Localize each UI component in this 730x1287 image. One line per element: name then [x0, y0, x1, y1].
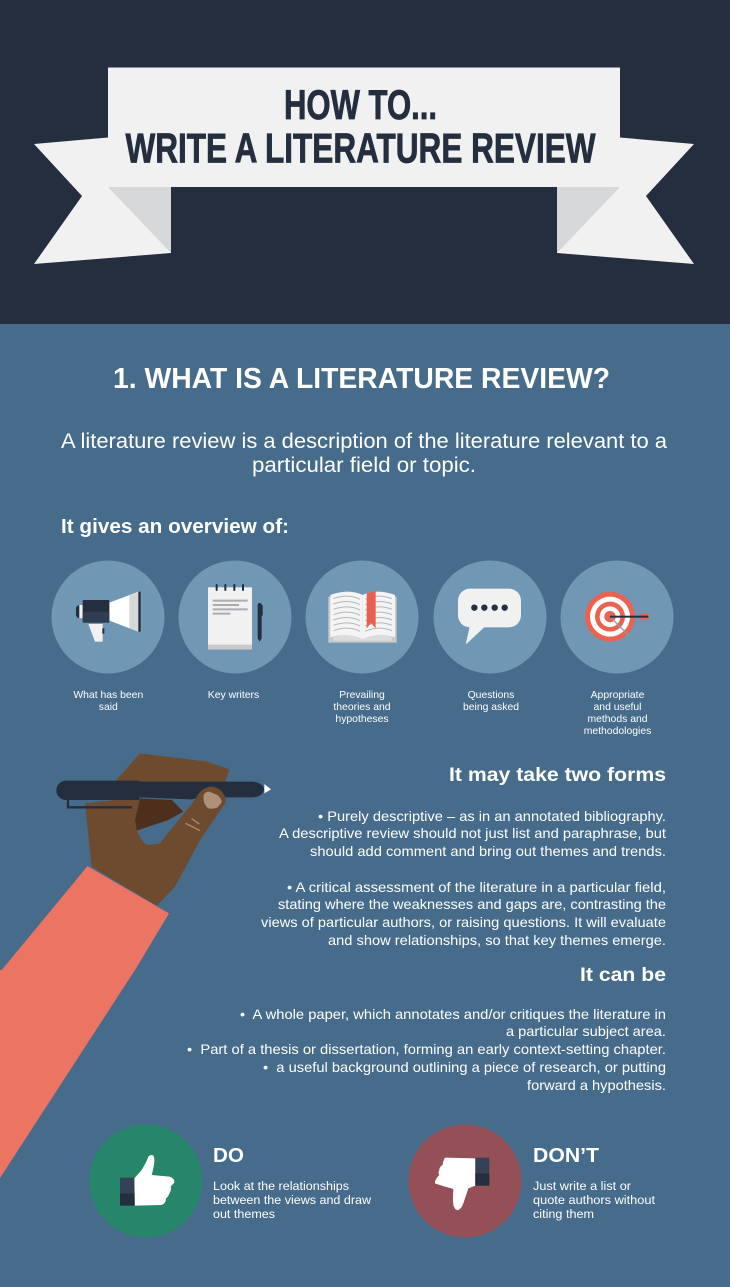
- intro text: [61, 429, 667, 477]
- label: said: [99, 702, 118, 713]
- label: Appropriate: [591, 690, 645, 701]
- paragraph: descriptive: A descriptive review should not just list and paraphrase, but: [279, 826, 666, 841]
- item: questions being asked: [434, 560, 546, 713]
- do text: out themes: [213, 1207, 275, 1221]
- title: HOW TO...: [284, 81, 437, 128]
- hand: [85, 753, 229, 906]
- label: What has been: [73, 690, 143, 701]
- paragraph: descriptive: • Purely descriptive – as in an annotated bibliography.: [318, 809, 666, 824]
- panel: do: [89, 1124, 371, 1238]
- icon: megaphone: [76, 592, 141, 642]
- ribbon banner: [34, 68, 694, 264]
- don't text: citing them: [533, 1207, 594, 1221]
- intro text: particular field or topic.: [252, 453, 476, 477]
- text block: two forms: [261, 764, 666, 948]
- icon: speech bubble: [458, 589, 521, 645]
- label: and useful: [594, 702, 641, 713]
- paragraph: descriptive: should add comment and bring out themes and trends.: [310, 844, 666, 859]
- section heading: 1. WHAT IS A LITERATURE REVIEW?: [113, 363, 610, 395]
- sleeve: [0, 866, 169, 1178]
- subheading: It may take two forms: [449, 764, 666, 786]
- don't text: [533, 1144, 656, 1221]
- bullet list: • a useful background outlining a piece of research, or putting: [263, 1060, 666, 1075]
- item: key writers: [178, 560, 292, 701]
- label: methodologies: [584, 726, 651, 737]
- icon: notepad and pen: [208, 585, 263, 649]
- label: [463, 690, 519, 713]
- don't text: Just write a list or: [533, 1179, 631, 1193]
- subheading: It can be: [580, 964, 666, 986]
- don't text: quote authors without: [533, 1193, 656, 1207]
- do text: [213, 1144, 371, 1221]
- do text: between the views and draw: [213, 1193, 371, 1207]
- icon: target with arrow: [585, 592, 648, 642]
- overview heading: It gives an overview of:: [61, 515, 289, 538]
- text block: it can be: [187, 964, 666, 1093]
- paragraph: descriptive: [279, 809, 666, 859]
- label: [333, 690, 391, 725]
- bullet list: • A whole paper, which annotates and/or critiques the literature in: [240, 1007, 666, 1022]
- intro text: A literature review is a description of the literature relevant to a: [61, 429, 667, 453]
- knuckle lines: [186, 819, 200, 831]
- label: theories and: [333, 702, 391, 713]
- bullet list: a particular subject area.: [506, 1024, 666, 1039]
- item: methods: [560, 560, 674, 737]
- bullet list: forward a hypothesis.: [527, 1078, 666, 1093]
- pen: [56, 781, 271, 807]
- label: [73, 690, 143, 713]
- paragraph: critical: stating where the weaknesses and gaps are, contrasting the: [278, 897, 666, 912]
- paragraph: critical: views of particular authors, or raising questions. It will evaluate: [261, 915, 666, 930]
- thumb tip over pen: [195, 787, 226, 808]
- illustration: hand holding pen: [0, 753, 271, 1178]
- do text: DO: [213, 1144, 244, 1167]
- paragraph: critical: • A critical assessment of the literature in a particular field,: [287, 880, 666, 895]
- title: WRITE A LITERATURE REVIEW: [126, 125, 596, 172]
- thumbnail: [203, 792, 222, 809]
- label: [584, 690, 651, 737]
- label: methods and: [587, 714, 648, 725]
- label: being asked: [463, 702, 519, 713]
- label: Prevailing: [339, 690, 385, 701]
- paragraph: critical: [261, 880, 666, 948]
- panel: don't: [408, 1124, 656, 1238]
- label: Questions: [468, 690, 514, 701]
- icon: open book: [328, 591, 397, 643]
- label: Key writers: [208, 690, 259, 701]
- paragraph: critical: and show relationships, so that key themes emerge.: [328, 933, 666, 948]
- item: what has been said: [52, 560, 164, 713]
- label: hypotheses: [335, 714, 389, 725]
- bullet list: • Part of a thesis or dissertation, forming an early context-setting chapter.: [187, 1042, 666, 1057]
- back finger: [135, 798, 183, 831]
- do text: Look at the relationships: [213, 1179, 349, 1193]
- icon: thumbs down: [435, 1158, 489, 1210]
- title: [126, 81, 596, 172]
- header band: [0, 0, 730, 324]
- bullet list: [187, 1007, 666, 1093]
- item: prevailing theories: [306, 560, 418, 725]
- don't text: DON’T: [533, 1144, 599, 1167]
- icon: thumbs up: [120, 1155, 174, 1206]
